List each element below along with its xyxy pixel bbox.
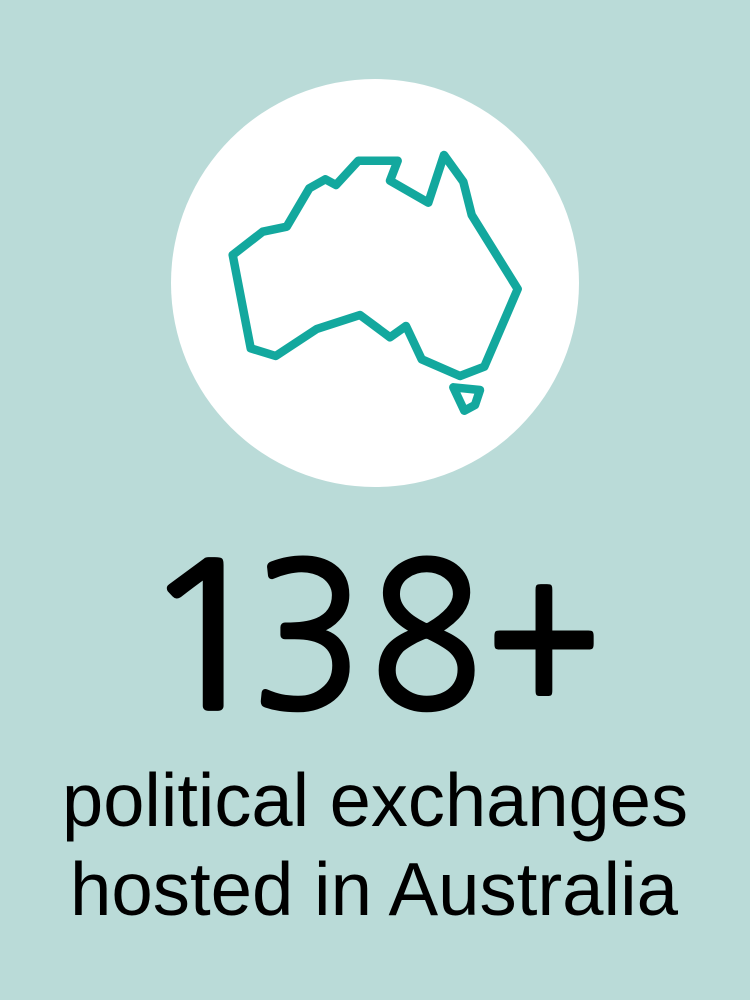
caption: political exchanges <box>62 758 688 842</box>
white circle badge <box>171 79 579 487</box>
icon: map of Australia <box>233 155 518 411</box>
big number: 8 <box>370 537 482 737</box>
big number <box>137 537 601 743</box>
big number: 3 <box>251 537 364 737</box>
big number: 1 <box>137 537 275 737</box>
caption: hosted in Australia <box>70 847 678 931</box>
caption <box>62 758 688 931</box>
big number: + <box>486 543 601 743</box>
